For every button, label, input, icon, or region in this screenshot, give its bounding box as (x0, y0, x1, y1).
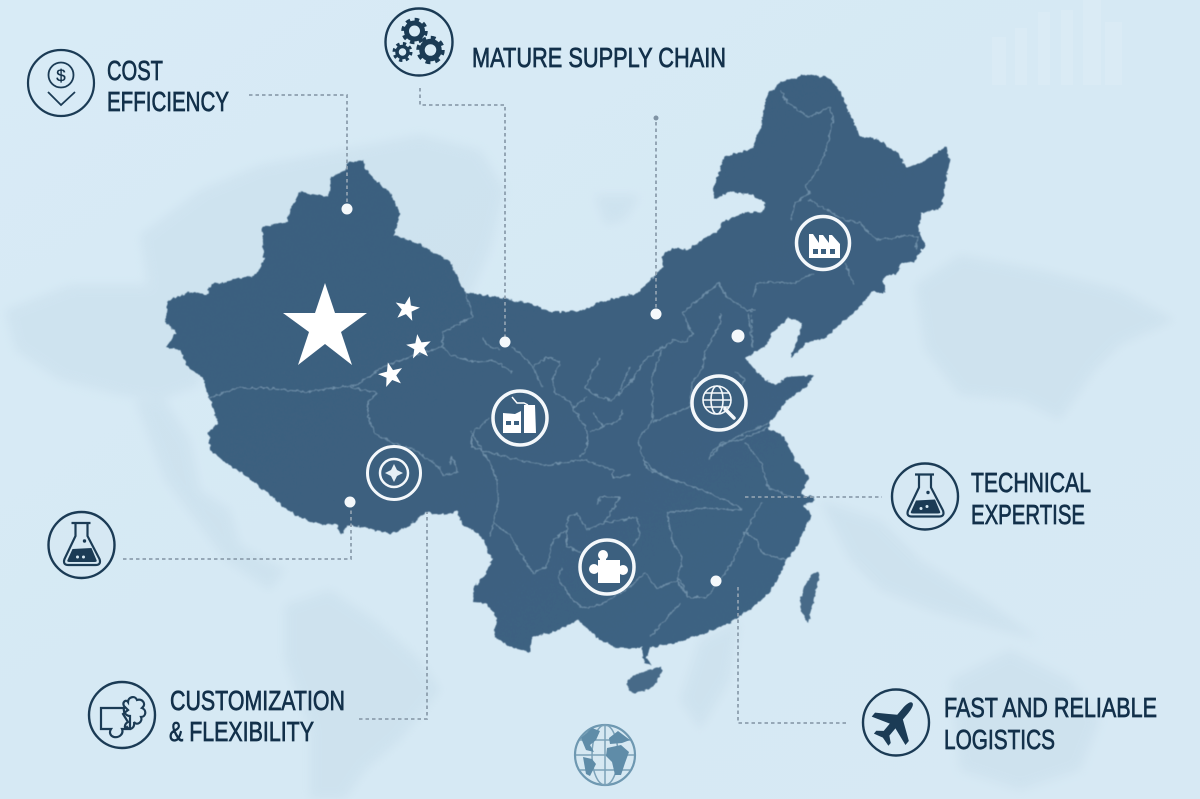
icon: globe at bottom (575, 725, 635, 785)
icon: flask (892, 464, 958, 530)
icon: left flask (48, 512, 114, 578)
icon: coin with down arrow: $ (56, 66, 66, 85)
callout: fast and reliable logistics (863, 689, 1157, 756)
map icon: central factory (493, 391, 547, 445)
small star 2 (405, 332, 433, 359)
connector: customization (359, 512, 427, 719)
icon: puzzle pieces (89, 682, 155, 748)
callout: technical expertise (892, 464, 1091, 530)
connector: cost efficiency (249, 95, 347, 209)
label: LOGISTICS (944, 724, 1055, 755)
map icon: globe search (692, 376, 746, 430)
label: CUSTOMIZATION (170, 685, 345, 716)
connector: logistics (738, 587, 846, 723)
flag stars (283, 283, 433, 388)
connector: top vertical (654, 116, 658, 314)
map icon: compass (368, 446, 420, 500)
callout: cost efficiency (28, 50, 229, 117)
map icon: northeast factory (796, 216, 850, 270)
label (971, 467, 1091, 530)
label (944, 692, 1157, 755)
icon: coin with down arrow (28, 50, 94, 116)
faint bar chart (992, 0, 1122, 85)
China map (165, 74, 950, 692)
mainland silhouette (165, 74, 950, 665)
label: TECHNICAL (971, 467, 1091, 498)
Taiwan (800, 572, 820, 623)
province borders (210, 90, 918, 637)
label: COST (107, 55, 163, 86)
small star 1 (393, 294, 422, 322)
label: EFFICIENCY (107, 86, 229, 117)
connector: left flask (123, 502, 351, 559)
large star (283, 283, 367, 365)
label: MATURE SUPPLY CHAIN (472, 42, 726, 73)
callout: customization and flexibility (89, 682, 345, 748)
icon: gears (386, 8, 452, 76)
label (169, 685, 345, 747)
small star 3 (376, 359, 406, 388)
label (107, 55, 229, 117)
label: EXPERTISE (971, 499, 1085, 530)
label: & FLEXIBILITY (169, 716, 314, 747)
map location dots (342, 204, 744, 586)
Hainan (627, 667, 661, 692)
connector: mature supply chain (420, 88, 505, 342)
callout: mature supply chain (386, 8, 726, 76)
connector: technical expertise (745, 496, 882, 498)
map icon: puzzle piece (580, 540, 634, 594)
icon: airplane (863, 689, 929, 756)
